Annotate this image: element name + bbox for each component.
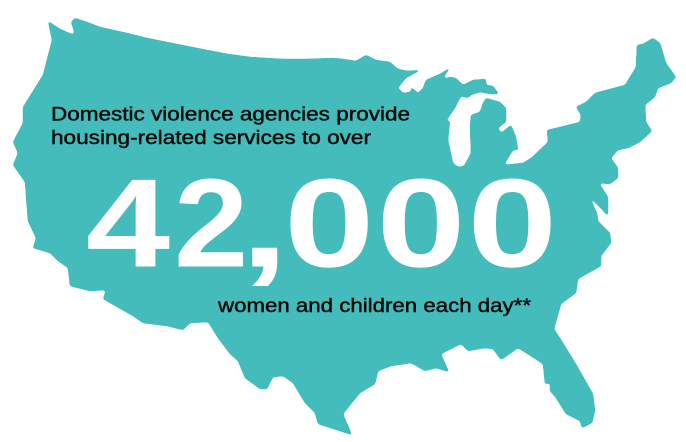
big number: 42,000: 0	[284, 152, 374, 293]
text: intro statement: Domestic violence agencies provide	[51, 104, 410, 126]
big number: 42,000: ,	[240, 153, 289, 294]
big number: 42,000: 2	[174, 152, 248, 294]
big number: 42,000: 0	[376, 153, 465, 294]
text: intro statement: housing-related services to over	[51, 127, 372, 149]
text: women and children each day: women and children each day**	[217, 295, 531, 317]
big number: 42,000	[86, 152, 557, 294]
big number: 42,000: 0	[468, 152, 557, 293]
big number: 42,000: 4	[86, 153, 170, 294]
text: intro statement	[51, 104, 410, 149]
